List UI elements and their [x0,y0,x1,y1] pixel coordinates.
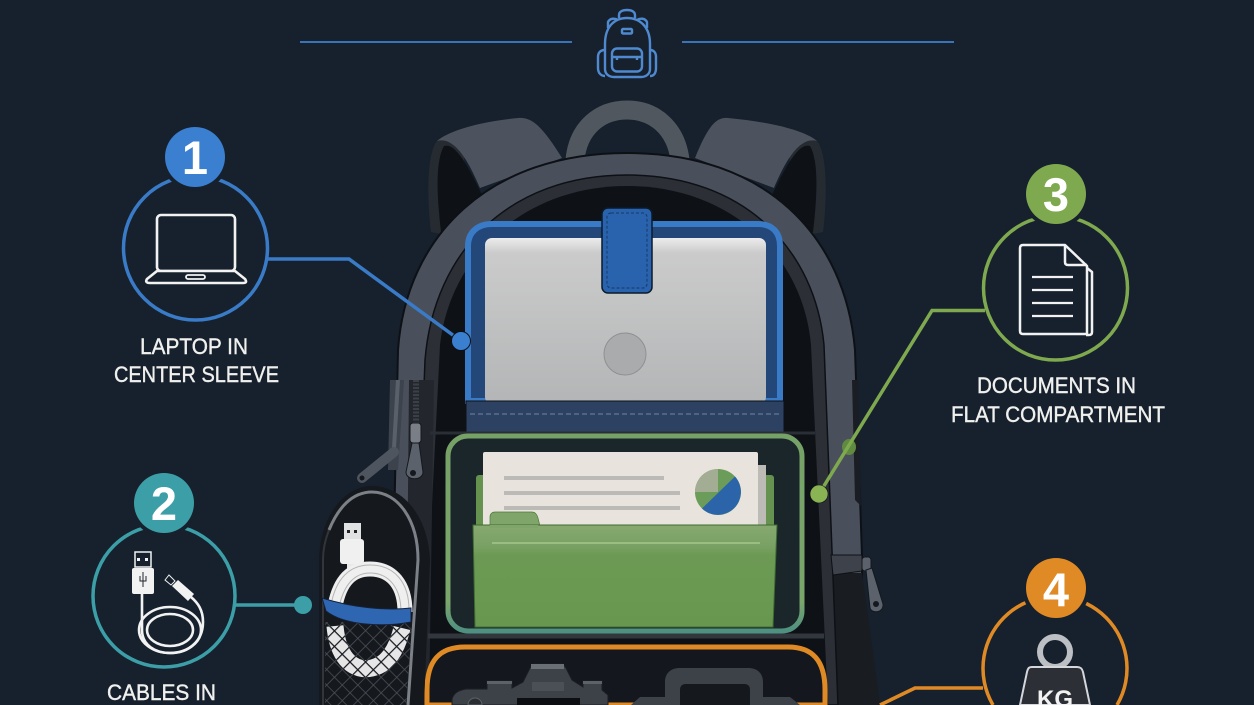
pie chart [695,469,741,515]
icon: backpack [598,10,656,77]
icon: document [1020,245,1092,335]
sleeve strap [602,208,652,293]
elastic band [322,598,411,625]
camera bag [631,668,800,705]
badge 1: 1 [182,131,208,184]
shoulder straps [428,118,826,240]
gear compartment panel [427,647,825,705]
rear folder sheet [476,475,774,535]
documents compartment panel [448,436,802,631]
right lower strap band [831,555,862,575]
laptop [485,238,766,404]
callout 3: documents [810,160,1165,503]
leader line [268,259,470,350]
side pocket right [832,573,880,705]
icon: KG weight [1020,637,1090,705]
badge 2: 2 [151,477,177,530]
label: FLAT COMPARTMENT [951,402,1165,427]
side mesh pocket [319,486,430,705]
top handle [575,110,680,160]
back paper [750,465,766,530]
badge 4 [1022,554,1090,622]
ring [984,216,1128,360]
left seam block [388,380,404,470]
leader line [880,688,983,705]
backpack illustration [319,110,883,705]
leader line [235,596,312,614]
coiled cable [331,565,409,612]
label [951,373,1165,427]
ring [93,525,235,667]
ring [983,596,1127,705]
side zippers [360,380,883,612]
camera [452,664,608,705]
mesh netting [325,622,412,705]
header rule and backpack icon [300,10,954,77]
callout 2: cables [93,469,312,705]
pocket band [466,401,784,432]
icon: laptop [146,215,246,283]
main body [390,153,862,705]
ring [124,176,268,320]
badge 2 [130,469,198,537]
badge 4: 4 [1043,563,1069,616]
label: CABLES IN [107,680,216,705]
label: LAPTOP IN [140,334,248,359]
USB plug [340,523,364,572]
shelf dividers [430,432,815,434]
label: CENTER SLEEVE [114,362,279,387]
callout 1: laptop [114,123,470,387]
inner dark band [412,175,838,705]
label [114,334,279,387]
badge 3: 3 [1043,168,1069,221]
icon: USB cable [132,552,203,653]
laptop sleeve panel [466,208,784,432]
badge 1 [161,123,229,191]
document paper [483,452,758,527]
leader line [810,310,985,503]
label: DOCUMENTS IN [977,373,1136,398]
callout 4: weight [880,554,1127,705]
green folder [473,512,777,627]
badge 3 [1022,160,1090,228]
inner cavity [422,186,828,705]
